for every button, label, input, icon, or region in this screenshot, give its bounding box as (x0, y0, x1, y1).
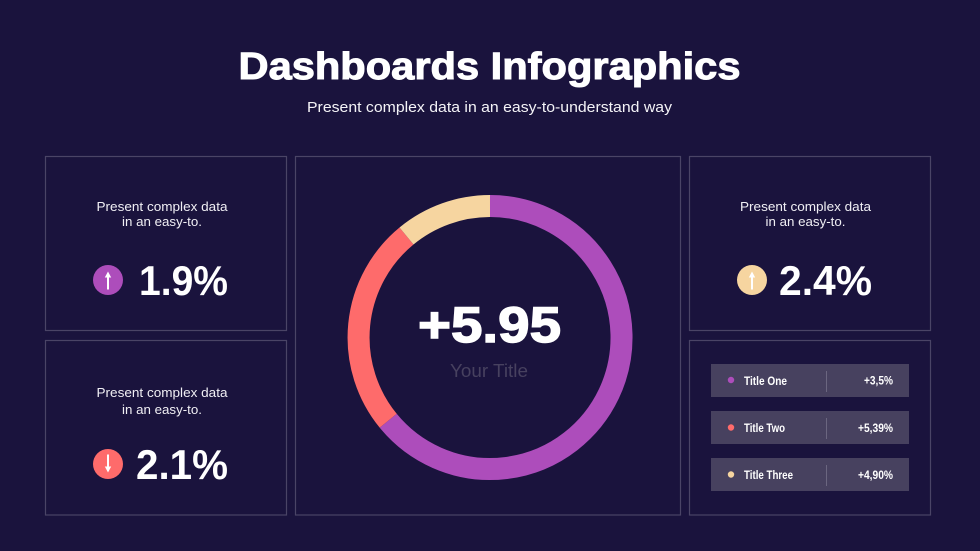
panel: top-left stat (46, 156, 286, 330)
row: Title Three (711, 458, 909, 491)
center label: Your Title (450, 361, 528, 381)
row: Title Three: +4,90% (858, 470, 893, 482)
row: Title Three: Title Three (744, 470, 793, 482)
text block: bottom-left description: in an easy-to. (122, 402, 202, 417)
red segment (359, 236, 406, 421)
text block: top-right description: Present complex data (740, 199, 872, 214)
row: Title One (711, 364, 909, 397)
row: Title Two: Title Two (744, 423, 785, 435)
cream segment (406, 206, 490, 236)
text block: bottom-left description (96, 385, 228, 417)
value: 2.4%: 2.4% (779, 257, 872, 304)
icon: cream up arrow (737, 265, 767, 295)
purple segment (388, 206, 622, 469)
panel: top-right stat (690, 156, 930, 330)
subtitle: Present complex data in an easy-to-understand way (307, 99, 673, 116)
row: Title Two: +5,39% (858, 423, 893, 435)
text block: top-right description (740, 199, 872, 229)
icon: red down arrow (93, 449, 123, 479)
panel: bottom-left stat (46, 340, 286, 515)
value: 1.9%: 1.9% (139, 257, 228, 304)
text block: top-left description (96, 199, 228, 229)
title: Dashboards Infographics (238, 46, 740, 88)
text block: bottom-left description: Present complex data (96, 385, 228, 400)
panel: bottom-right list (690, 340, 930, 515)
center value: +5.95 (418, 297, 561, 353)
icon: purple up arrow (93, 265, 123, 295)
text block: top-left description: Present complex data (96, 199, 228, 214)
text block: top-right description: in an easy-to. (766, 214, 846, 229)
value: 2.1%: 2.1% (136, 441, 228, 488)
panel: center donut (296, 156, 680, 515)
donut chart (359, 206, 622, 469)
text block: top-left description: in an easy-to. (122, 214, 202, 229)
row: Title One: +3,5% (864, 376, 893, 388)
row: Title One: Title One (744, 376, 787, 388)
row: Title Two (711, 411, 909, 444)
